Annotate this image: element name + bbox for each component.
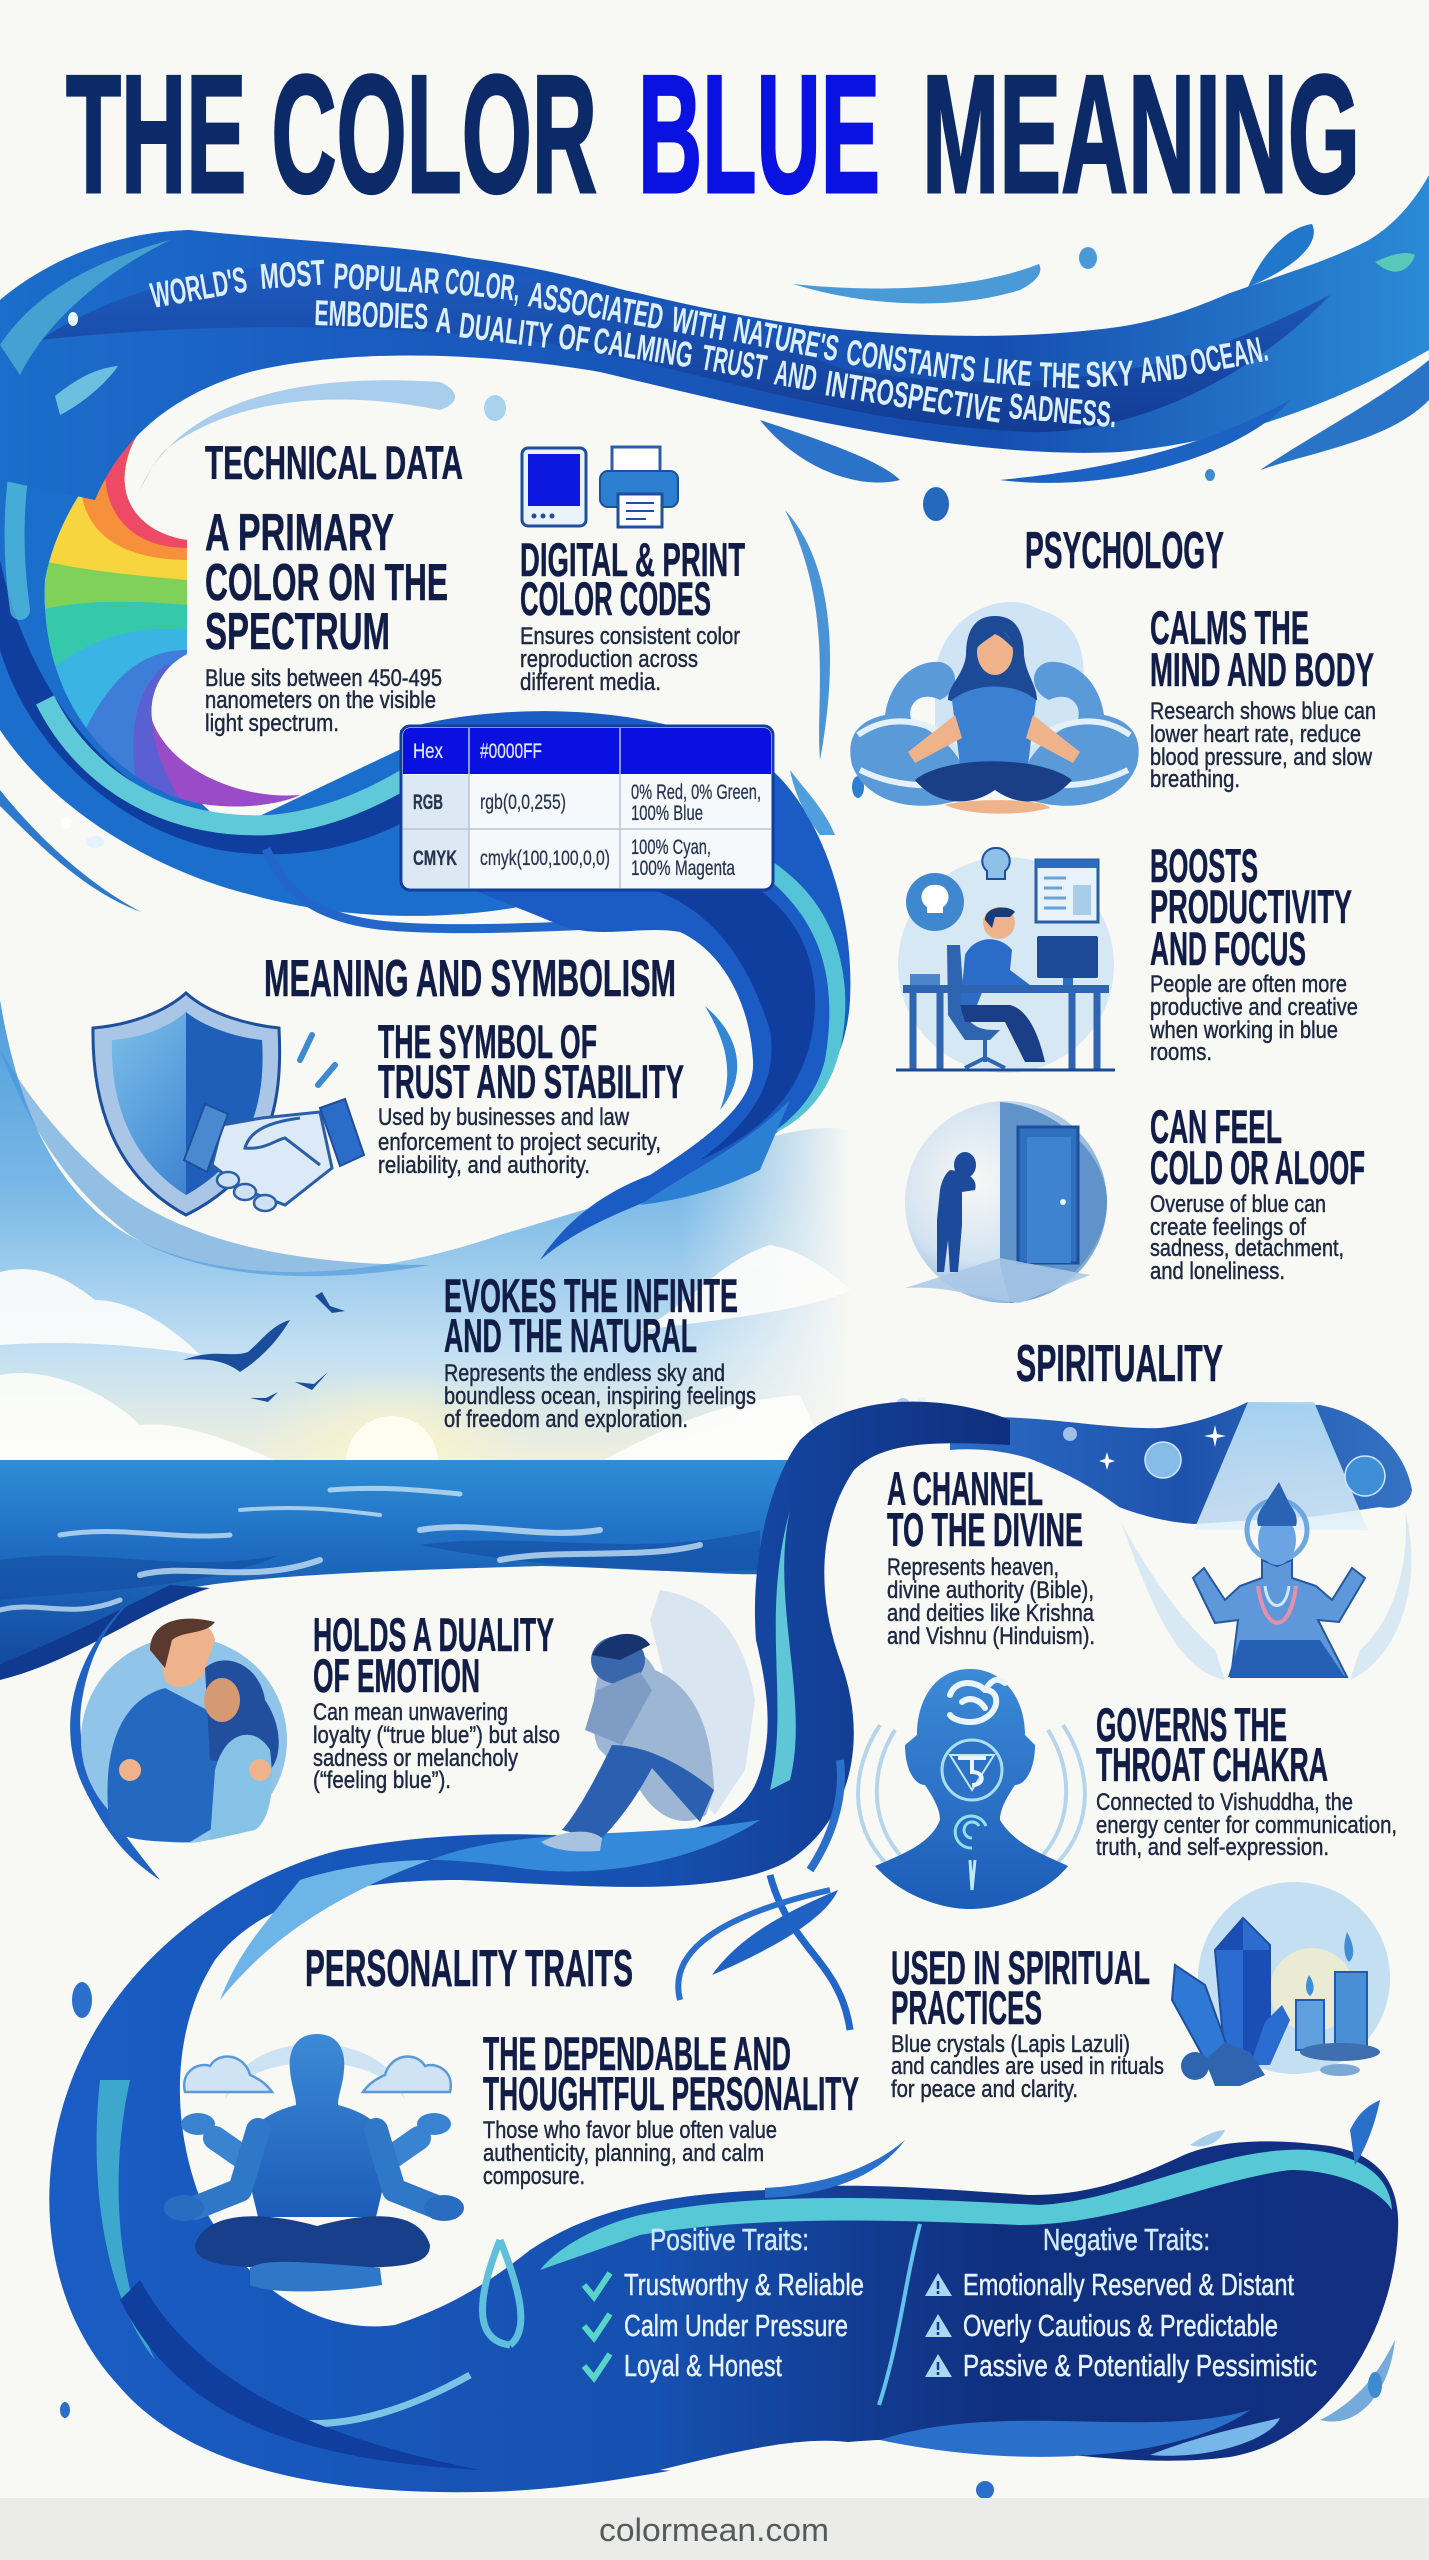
text block: evokes the infinite: EVOKES THE INFINITE [444, 1269, 738, 1322]
text block: evokes the infinite [444, 1269, 756, 1433]
text block: dependable personality: THE DEPENDABLE AND [483, 2027, 791, 2080]
text block: governs throat chakra: truth, and self-expression. [1096, 1834, 1329, 1861]
clouds around figure [1120, 1510, 1411, 1680]
icon: birds [183, 1292, 345, 1402]
text block: governs throat chakra: Connected to Vishuddha, the [1096, 1789, 1353, 1816]
text block: symbol of trust: enforcement to project security, [378, 1129, 661, 1156]
text block: a primary color: nanometers on the visible [205, 687, 436, 714]
icon: printer [600, 447, 678, 527]
text block: boosts productivity: rooms. [1150, 1039, 1212, 1066]
banner text: POPULAR [333, 255, 441, 302]
text block: spiritual practices: and candles are used in rituals [891, 2053, 1164, 2080]
text block: calms the mind: breathing. [1150, 766, 1240, 793]
text block: negative traits: Passive & Potentially Pessimistic [963, 2348, 1317, 2383]
banner text [147, 252, 1271, 435]
text block: calms the mind [1150, 601, 1376, 793]
text block: spiritual practices: USED IN SPIRITUAL [891, 1941, 1150, 1994]
S band under table [400, 711, 864, 1260]
text block: holds a duality: OF EMOTION [313, 1649, 480, 1702]
banner text: EMBODIES [314, 292, 429, 337]
text block: positive traits: Loyal & Honest [624, 2348, 782, 2383]
text block: evokes the infinite: boundless ocean, inspiring feelings [444, 1383, 756, 1410]
text block: boosts productivity: People are often more [1150, 971, 1347, 998]
text block: calms the mind: lower heart rate, reduce [1150, 721, 1361, 748]
text block: digital and print: reproduction across [520, 646, 698, 673]
color code table: 100% Cyan, [631, 836, 711, 859]
swoosh beside couple [70, 1590, 160, 1880]
text block: a primary color: COLOR ON THE [205, 554, 448, 612]
text block: governs throat chakra: GOVERNS THE [1096, 1698, 1287, 1751]
color code table: Hex [413, 740, 443, 763]
title: BLUE [638, 40, 880, 228]
text block: negative traits: Emotionally Reserved & Distant [963, 2267, 1294, 2302]
color code table: CMYK [413, 847, 457, 870]
text block: positive traits: Trustworthy & Reliable [624, 2267, 864, 2302]
color code table: 100% Blue [631, 802, 703, 825]
text block: boosts productivity: productive and creative [1150, 994, 1358, 1021]
text block: positive traits: Calm Under Pressure [624, 2308, 848, 2343]
decorative swirl above technical data [140, 380, 455, 490]
text block: channel to divine: and Vishnu (Hinduism). [887, 1623, 1095, 1650]
text block: can feel cold: sadness, detachment, [1150, 1235, 1344, 1262]
illustration: figure by a door [905, 1101, 1107, 1303]
text block: holds a duality: (“feeling blue”). [313, 1767, 451, 1794]
text block: calms the mind: CALMS THE [1150, 601, 1309, 654]
color code table: 0% Red, 0% Green, [631, 781, 761, 804]
banner text: A [434, 299, 454, 341]
banner text: CONSTANTS [844, 331, 978, 390]
text block: spiritual practices: Blue crystals (Lapis Lazuli) [891, 2031, 1130, 2058]
banner text: LIKE [981, 349, 1034, 394]
text block: spiritual practices [891, 1941, 1164, 2103]
color code table: #0000FF [480, 740, 542, 763]
text block: positive traits [584, 2222, 864, 2383]
text block: a primary color [205, 504, 448, 737]
text block: holds a duality: HOLDS A DUALITY [313, 1608, 554, 1661]
banner text: NATURE'S [730, 309, 842, 369]
text block: holds a duality: sadness or melancholy [313, 1745, 518, 1772]
text block: negative traits: Overly Cautious & Predictable [963, 2308, 1278, 2343]
heading: psychology: PSYCHOLOGY [1025, 522, 1224, 580]
ocean [0, 1460, 810, 1664]
text block: spiritual practices: PRACTICES [891, 1981, 1042, 2034]
top left sweep and lower swirl [0, 230, 672, 929]
decorative droplet [484, 395, 506, 421]
illustration: crystals and candles [1172, 1882, 1390, 2086]
icon: warning triangles [925, 2273, 952, 2377]
text block: dependable personality: Those who favor blue often value [483, 2117, 777, 2144]
text block: digital and print [520, 533, 745, 696]
text block: a primary color: Blue sits between 450-495 [205, 665, 442, 692]
text block: channel to divine [887, 1462, 1095, 1650]
text block: digital and print: Ensures consistent color [520, 623, 740, 650]
text block: boosts productivity: when working in blue [1149, 1017, 1338, 1044]
text block: negative traits [925, 2222, 1317, 2383]
banner text: AND [1138, 345, 1190, 391]
illustration: meditating figure with clouds [164, 2034, 464, 2291]
banner text: MOST [259, 252, 326, 297]
text block: calms the mind: blood pressure, and slow [1150, 744, 1373, 771]
banner text: CALMING [591, 319, 696, 376]
illustration: sad man sitting [541, 1590, 755, 1851]
text block: symbol of trust: THE SYMBOL OF [378, 1015, 597, 1068]
illustration: meditating woman in waves [850, 602, 1139, 814]
text block: channel to divine: divine authority (Bible), [887, 1577, 1094, 1604]
text block: digital and print: DIGITAL & PRINT [520, 533, 745, 586]
sky and sea scene [0, 1000, 879, 1680]
text block: symbol of trust: Used by businesses and law [378, 1104, 630, 1131]
text block: boosts productivity: AND FOCUS [1150, 922, 1306, 975]
starry sky panel [896, 1397, 1412, 1530]
title: THE COLOR [66, 40, 597, 228]
text block: dependable personality [483, 2027, 859, 2190]
illustration: man working at desk [896, 848, 1115, 1073]
banner text: SADNESS. [1007, 385, 1118, 435]
banner text: TRUST [699, 337, 770, 388]
footer bar: colormean.com [599, 2512, 829, 2548]
lower swirl ring and traits wave [49, 1402, 1398, 2499]
text block: channel to divine: and deities like Krishna [887, 1600, 1095, 1627]
swoosh right of digital block [785, 510, 830, 760]
text block: channel to divine: A CHANNEL [887, 1462, 1043, 1515]
heading: spirituality: SPIRITUALITY [1016, 1335, 1223, 1393]
text block: dependable personality: authenticity, planning, and calm [483, 2140, 764, 2167]
top banner ribbon [0, 175, 1429, 521]
banner text: AND [772, 352, 820, 399]
icon: tablet [522, 448, 586, 526]
banner text: SKY [1085, 352, 1134, 395]
banner text: WITH [669, 299, 729, 348]
banner text: THE [1039, 354, 1081, 396]
section: technical data heading: TECHNICAL DATA [205, 436, 463, 489]
text block: symbol of trust [378, 1015, 684, 1179]
text block: boosts productivity: BOOSTS [1150, 839, 1258, 892]
text block: dependable personality: composure. [483, 2163, 585, 2190]
text block: boosts productivity [1149, 839, 1358, 1066]
banner text: COLOR, [443, 260, 522, 309]
illustration: head with chakra symbols [858, 1669, 1085, 1909]
text block: channel to divine: TO THE DIVINE [887, 1503, 1083, 1556]
text block: evokes the infinite: Represents the endless sky and [444, 1360, 725, 1387]
heading: meaning and symbolism: MEANING AND SYMBOLISM [264, 950, 676, 1008]
sun [252, 1370, 532, 1510]
text block: holds a duality: loyalty (“true blue”) but also [313, 1722, 560, 1749]
text block: negative traits: Negative Traits: [1043, 2222, 1210, 2257]
text block: can feel cold: Overuse of blue can [1150, 1191, 1326, 1218]
text block: a primary color: SPECTRUM [205, 603, 390, 661]
clouds [0, 1245, 850, 1462]
banner text: DUALITY [457, 304, 554, 356]
text block: symbol of trust: reliability, and authority. [378, 1152, 590, 1179]
text block: evokes the infinite: AND THE NATURAL [444, 1309, 697, 1362]
text block: digital and print: different media. [520, 669, 661, 696]
banner text: WORLD'S [147, 259, 250, 316]
text block: evokes the infinite: of freedom and exploration. [444, 1406, 688, 1433]
text block: can feel cold: create feelings of [1150, 1214, 1306, 1241]
illustration: embracing couple [81, 1619, 287, 1843]
icon: shield with handshake [93, 993, 364, 1215]
text block: dependable personality: THOUGHTFUL PERSONALITY [483, 2067, 859, 2120]
text block: can feel cold [1150, 1100, 1365, 1285]
banner text: INTROSPECTIVE [823, 362, 1005, 431]
text block: symbol of trust: TRUST AND STABILITY [378, 1055, 684, 1108]
text block: can feel cold: and loneliness. [1150, 1258, 1285, 1285]
color code table: cmyk(100,100,0,0) [480, 847, 610, 870]
illustration: deity figure [1193, 1482, 1365, 1677]
color code table: 100% Magenta [631, 857, 735, 880]
text block: governs throat chakra [1096, 1698, 1397, 1861]
text block: channel to divine: Represents heaven, [887, 1554, 1059, 1581]
color code table: rgb(0,0,255) [480, 791, 566, 814]
text block: a primary color: A PRIMARY [205, 504, 394, 562]
color code table: RGB [413, 791, 443, 814]
rainbow spectrum [44, 436, 300, 806]
text block: calms the mind: Research shows blue can [1150, 698, 1376, 725]
color code table [401, 726, 773, 890]
heading: personality traits: PERSONALITY TRAITS [305, 1940, 633, 1998]
footer bar [0, 2498, 1429, 2560]
text block: holds a duality [313, 1608, 560, 1794]
banner text: OCEAN. [1187, 328, 1271, 383]
text block: spiritual practices: for peace and clarity. [891, 2076, 1078, 2103]
banner text: OF [556, 315, 592, 360]
text block: holds a duality: Can mean unwavering [313, 1699, 508, 1726]
text block: positive traits: Positive Traits: [650, 2222, 809, 2257]
text block: can feel cold: CAN FEEL [1150, 1100, 1282, 1153]
text block: a primary color: light spectrum. [205, 710, 339, 737]
text block: digital and print: COLOR CODES [520, 572, 711, 625]
banner text: ASSOCIATED [526, 274, 667, 337]
icon: check marks [584, 2273, 610, 2378]
